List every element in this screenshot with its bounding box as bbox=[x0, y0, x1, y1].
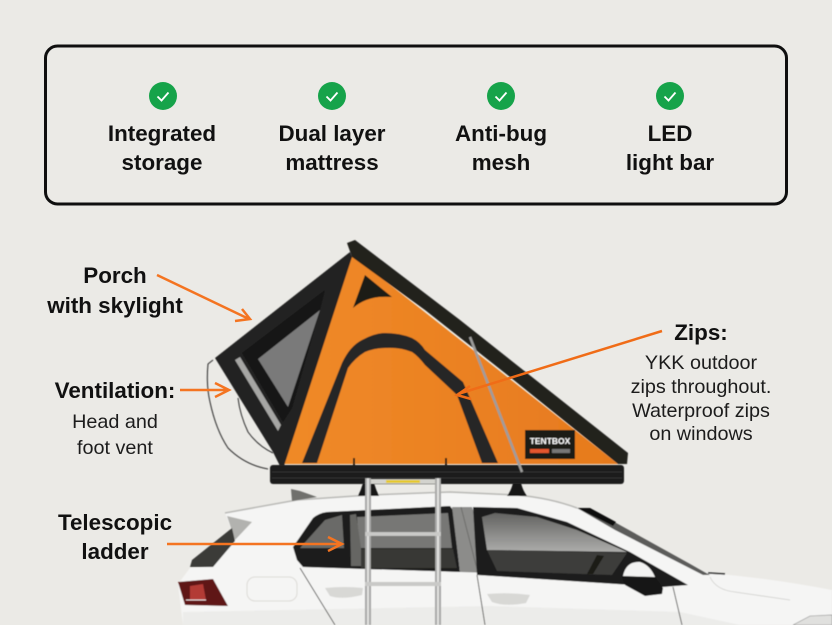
front window frame bbox=[473, 507, 688, 587]
windscreen strip bbox=[577, 508, 710, 575]
rear spoiler wedge bbox=[227, 516, 252, 540]
logo label bbox=[525, 430, 575, 459]
base bar bbox=[270, 465, 624, 484]
feature: dual layer mattress: Dual layer bbox=[278, 121, 386, 146]
feature: led light bar: light bar bbox=[626, 150, 714, 175]
rear window panes bbox=[357, 513, 452, 548]
triangle window bbox=[353, 275, 392, 308]
rear side window frame bbox=[293, 506, 460, 572]
label: telescopic ladder: ladder bbox=[81, 539, 149, 564]
label: telescopic ladder: Telescopic bbox=[58, 510, 172, 535]
door lines bbox=[300, 568, 682, 625]
mirror bbox=[622, 577, 663, 596]
feature: led light bar bbox=[626, 82, 714, 175]
headlight bbox=[793, 615, 832, 625]
feature: dual layer mattress bbox=[278, 82, 386, 175]
orange canvas bbox=[283, 255, 618, 464]
shark fin bbox=[291, 489, 317, 501]
vent strip bbox=[235, 357, 281, 431]
feature: integrated storage: Integrated bbox=[108, 121, 216, 146]
label: ventilation bbox=[55, 378, 175, 459]
feature: anti-bug mesh bbox=[455, 82, 547, 175]
arrow: porch bbox=[157, 275, 250, 321]
roof beam bbox=[347, 240, 628, 464]
telescopic ladder bbox=[365, 478, 441, 625]
hood crease bbox=[710, 577, 790, 600]
fuel cap bbox=[247, 577, 297, 601]
label: zips: on windows bbox=[649, 423, 753, 445]
door arch bbox=[302, 333, 498, 463]
label: ventilation: Ventilation: bbox=[55, 378, 175, 403]
feature: led light bar: LED bbox=[648, 121, 692, 146]
car body bbox=[178, 493, 832, 625]
toggle clips bbox=[353, 458, 447, 465]
tail light bbox=[178, 579, 228, 606]
support strut bbox=[470, 337, 522, 472]
roof rail bbox=[225, 492, 577, 513]
feature: anti-bug mesh: Anti-bug bbox=[455, 121, 547, 146]
door handles bbox=[325, 587, 363, 598]
feature: dual layer mattress: mattress bbox=[285, 150, 379, 175]
label: porch with skylight: with skylight bbox=[46, 293, 183, 318]
feature: integrated storage bbox=[108, 82, 216, 175]
arrow: ventilation bbox=[180, 383, 229, 397]
car bbox=[178, 483, 832, 625]
label: zips: zips throughout. bbox=[631, 376, 771, 398]
label: porch with skylight bbox=[46, 263, 183, 318]
porch panel bbox=[215, 252, 352, 466]
label: zips: Zips: bbox=[674, 320, 728, 345]
guy cords bbox=[207, 360, 273, 469]
porch mesh surround bbox=[242, 290, 325, 422]
hatch glass bbox=[190, 528, 235, 567]
roof mounts bbox=[358, 483, 379, 496]
panel: features bbox=[46, 46, 786, 204]
porch mesh window bbox=[258, 310, 320, 407]
tent bbox=[207, 240, 628, 484]
feature: integrated storage: storage bbox=[122, 150, 202, 175]
front window glass bbox=[482, 513, 627, 552]
label: ventilation: Head and bbox=[72, 411, 158, 433]
label: zips bbox=[631, 320, 771, 445]
label: zips: YKK outdoor bbox=[645, 352, 757, 374]
lower body shade bbox=[183, 606, 740, 625]
label: telescopic ladder bbox=[58, 510, 172, 564]
feature: anti-bug mesh: mesh bbox=[472, 150, 530, 175]
label: porch with skylight: Porch bbox=[83, 263, 147, 288]
arrow: zips bbox=[457, 331, 662, 399]
arrow: ladder bbox=[167, 537, 342, 551]
label: ventilation: foot vent bbox=[77, 437, 153, 459]
b pillar bbox=[452, 507, 492, 573]
label: zips: Waterproof zips bbox=[632, 400, 770, 422]
logo label: TENTBOX bbox=[530, 436, 571, 446]
